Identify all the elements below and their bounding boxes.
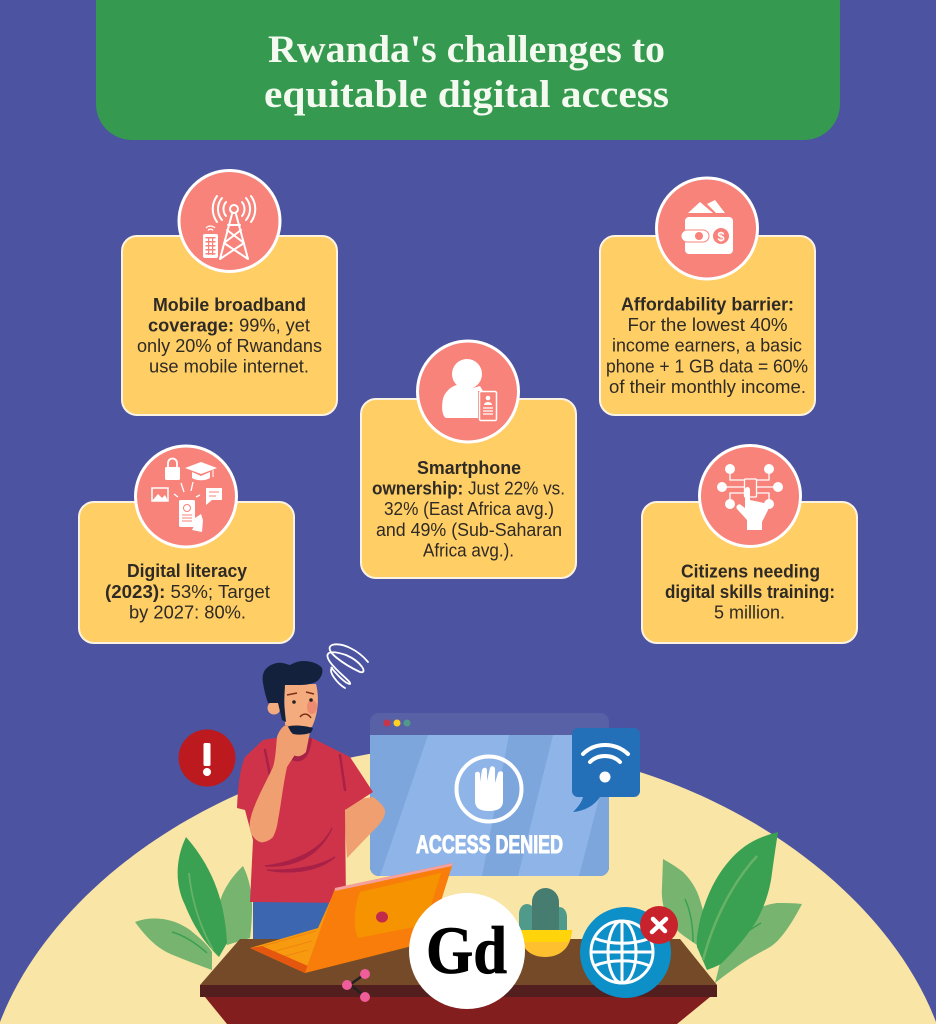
panel: affordability barrier <box>600 178 815 415</box>
text: affordability: For the lowest 40% <box>628 315 788 335</box>
icon: pink scissors <box>342 969 370 1002</box>
icon: globe with x <box>580 906 678 998</box>
text: mobile broadband: use mobile internet. <box>149 356 309 376</box>
icon: wifi speech bubble <box>572 728 640 812</box>
text: digital literacy: Digital literacy <box>127 561 247 581</box>
text: smartphone: 32% (East Africa avg.) <box>384 499 554 519</box>
illustration: man <box>237 661 385 945</box>
text: affordability: phone + 1 GB data = 60% <box>606 356 808 376</box>
text: digital literacy: (2023): 53%; Target <box>105 582 270 602</box>
hair <box>263 661 322 722</box>
text: smartphone <box>372 458 565 560</box>
panel: mobile broadband coverage <box>122 170 337 415</box>
illustration: laptop <box>250 863 453 973</box>
beard <box>286 725 313 735</box>
text: smartphone: and 49% (Sub-Saharan <box>376 520 562 540</box>
illustration: table <box>200 939 717 1024</box>
text: smartphone: ownership: Just 22% vs. <box>372 478 565 498</box>
icon: digital literacy <box>136 446 236 547</box>
text: affordability: Affordability barrier: <box>621 294 794 314</box>
icon: wallet <box>656 178 758 279</box>
panel: smartphone ownership <box>361 341 576 578</box>
shirt <box>237 738 373 903</box>
icon: hand touching network <box>700 446 800 546</box>
illustration: left plant <box>135 837 252 970</box>
neck <box>287 722 312 756</box>
panel: digital skills training <box>642 446 857 643</box>
text: access denied: ACCESS DENIED <box>416 831 563 859</box>
thinking arm <box>250 725 298 842</box>
title <box>264 28 669 116</box>
illustration: access denied window <box>370 713 609 876</box>
text: smartphone: Smartphone <box>417 458 521 478</box>
text: affordability <box>606 294 808 397</box>
panel: digital literacy <box>79 446 294 643</box>
text: affordability: of their monthly income. <box>609 377 806 397</box>
icon: stop hand <box>456 756 522 822</box>
text: mobile broadband: only 20% of Rwandans <box>137 336 322 356</box>
header banner <box>96 0 840 140</box>
icon: wallet: $ <box>717 229 725 244</box>
icon: cell tower and phone <box>179 170 280 272</box>
logo: Gd: Gd <box>426 912 507 988</box>
text: skills: Citizens needing <box>681 562 820 582</box>
eyes and mouth <box>292 700 296 704</box>
title: Rwanda's challenges to <box>268 28 665 71</box>
text: mobile broadband <box>137 295 322 376</box>
logo: Gd <box>409 893 525 1009</box>
text: digital literacy: by 2027: 80%. <box>129 602 246 622</box>
icon: person with phone <box>418 341 518 442</box>
text: digital literacy <box>105 561 270 622</box>
illustration: cactus pot <box>519 888 572 957</box>
text: smartphone: Africa avg.). <box>423 540 514 560</box>
text: affordability: income earners, a basic <box>612 336 802 356</box>
title: equitable digital access <box>264 73 669 116</box>
icon: alert <box>178 730 236 786</box>
text: mobile broadband: coverage: 99%, yet <box>148 316 310 336</box>
text: skills: digital skills training: <box>665 582 835 602</box>
right arm <box>344 797 385 858</box>
face <box>284 684 318 727</box>
text: mobile broadband: Mobile broadband <box>153 295 306 315</box>
jeans <box>253 900 329 945</box>
icon: dizzy swirl <box>327 644 368 688</box>
text: skills: 5 million. <box>714 602 785 622</box>
text: skills <box>665 562 835 622</box>
illustration: right plant <box>662 832 802 983</box>
